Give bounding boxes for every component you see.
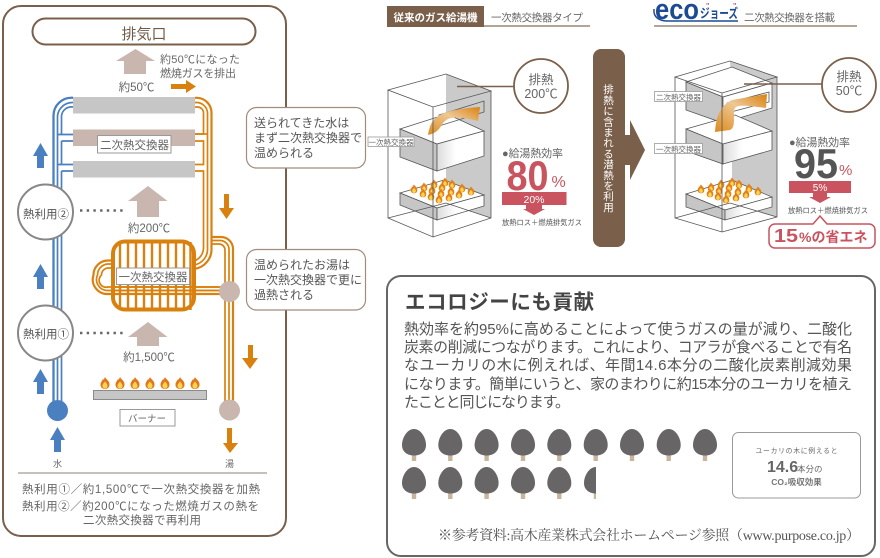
label: 50 degrees: 約50℃ bbox=[119, 80, 155, 94]
label: 200 degrees: 約200℃ bbox=[128, 221, 171, 235]
body text: たことと同じになります。 bbox=[404, 394, 570, 411]
notes: 熱利用②／約200℃になった燃焼ガスの熱を bbox=[22, 499, 259, 513]
notes: 熱利用①／約1,500℃で一次熱交換器を加熱 bbox=[22, 482, 260, 496]
label: hot water: 湯 bbox=[225, 459, 234, 469]
callout: 14.6 trees: ユーカリの木に例えると bbox=[756, 446, 838, 455]
primary block bbox=[686, 115, 772, 164]
panel: ecology contribution bbox=[387, 276, 875, 556]
central arrow: latent heat use: 排熱に含まれる潜熱を利用 bbox=[602, 83, 614, 213]
header: eco jozu: " bbox=[733, 3, 736, 10]
flames bbox=[100, 377, 200, 389]
label: secondary exchanger: 二次熱交換器 bbox=[100, 139, 169, 152]
callout: 15 percent saving: %の省エネ bbox=[799, 229, 867, 245]
efficiency 80: 放熱ロス＋燃焼排気ガス bbox=[502, 218, 582, 227]
header: conventional heater: 従来のガス給湯機 bbox=[394, 11, 478, 24]
use point 1 bbox=[18, 306, 125, 360]
arrow: 1500 degree gas bbox=[128, 322, 168, 346]
notes bbox=[22, 482, 260, 527]
header: eco jozu: ジョーズ bbox=[700, 6, 738, 21]
efficiency 95: 5% bbox=[813, 183, 827, 194]
burner block bbox=[400, 180, 484, 220]
efficiency 80: 80 bbox=[506, 152, 548, 199]
flames bbox=[698, 178, 761, 203]
use point 1: 熱利用① bbox=[23, 328, 69, 341]
central arrow: latent heat use bbox=[593, 49, 645, 247]
header: eco jozu: " bbox=[706, 3, 709, 10]
efficiency 95: ●給湯熱効率 bbox=[789, 136, 850, 149]
efficiency 80: 20% bbox=[523, 194, 545, 206]
header: conventional heater: 一次熱交換器タイプ bbox=[491, 11, 584, 24]
efficiency 95: 放熱ロス＋燃焼排気ガス bbox=[788, 206, 868, 215]
labels: 一次熱交換器 bbox=[656, 144, 701, 154]
body text: 炭素の削減につながります。これにより、コアラが食べることで有名 bbox=[404, 339, 852, 356]
header: eco jozu bbox=[654, 0, 857, 26]
callout: primary exchanger note: 温められたお湯は bbox=[254, 258, 350, 272]
callout: 14.6 trees: CO₂吸収効果 bbox=[771, 477, 822, 487]
label: 一次熱交換器 bbox=[368, 137, 414, 147]
label: primary exchanger: 一次熱交換器 bbox=[118, 271, 188, 284]
pipes: blue water line bbox=[53, 98, 73, 405]
callout: secondary exchanger note: 送られてきた水は bbox=[254, 115, 349, 130]
efficiency 95: 95 bbox=[794, 140, 838, 187]
trees pictogram bbox=[402, 429, 717, 499]
primary heat exchanger bbox=[113, 242, 219, 310]
efficiency 80: % bbox=[552, 174, 566, 191]
callout: 14.6 trees: 14.6 bbox=[767, 459, 798, 476]
body text: なユーカリの木に例えれば、年間14.6本分の二酸化炭素削減効果 bbox=[404, 357, 852, 374]
labels: 二次熱交換器 bbox=[656, 92, 701, 102]
label: burner bbox=[120, 410, 175, 426]
use point 2 bbox=[18, 184, 125, 240]
badge: exhaust heat 200: 排熱 bbox=[528, 73, 554, 87]
efficiency 95: % bbox=[839, 162, 852, 179]
callout: primary exchanger note: 一次熱交換器で更に bbox=[254, 273, 362, 287]
body text: 熱効率を約95%に高めることによって使うガスの量が減り、二酸化 bbox=[404, 321, 852, 338]
callout: 15 percent saving: 15 bbox=[774, 226, 798, 246]
arrow: exhaust gas up bbox=[116, 49, 155, 74]
diagram: conventional heater box bbox=[368, 74, 491, 237]
arrows: hot water down bbox=[219, 194, 258, 453]
callout: primary exchanger note bbox=[246, 250, 366, 310]
callout: secondary exchanger note: まず二次熱交換器で bbox=[254, 131, 362, 145]
badge: exhaust heat 200 bbox=[457, 59, 568, 113]
efficiency 95 bbox=[788, 136, 868, 215]
heading: exhaust port: 排気口 bbox=[121, 26, 167, 43]
burner bbox=[94, 390, 206, 400]
label: burner: バーナー bbox=[128, 414, 166, 425]
text: exhaust note bbox=[160, 52, 240, 80]
secondary block bbox=[686, 67, 772, 123]
callout: 15 percent saving bbox=[769, 216, 875, 248]
header: eco jozu: 二次熱交換器を搭載 bbox=[744, 11, 836, 24]
label: 1500 degrees: 約1,500℃ bbox=[123, 350, 175, 364]
arrow: gas flow bbox=[715, 94, 767, 132]
body text bbox=[404, 321, 852, 411]
header: conventional heater bbox=[387, 6, 590, 27]
primary exchanger block bbox=[400, 114, 484, 171]
diagram: eco heater box bbox=[654, 61, 777, 232]
badge: exhaust heat 50: 排熱 bbox=[836, 70, 862, 84]
badge: exhaust heat 50: 50℃ bbox=[836, 84, 862, 98]
junction nodes bbox=[47, 281, 240, 421]
arrow: 200 degree gas bbox=[128, 186, 168, 217]
burner block bbox=[686, 180, 772, 220]
badge: exhaust heat 200: 200℃ bbox=[524, 87, 558, 101]
use point 2: 熱利用② bbox=[23, 208, 69, 221]
heading: exhaust port bbox=[32, 18, 256, 44]
efficiency 80 bbox=[502, 147, 582, 227]
labels bbox=[654, 92, 702, 154]
pipes: orange hot water line bbox=[93, 98, 233, 410]
text: exhaust note: 約50℃になった bbox=[160, 52, 240, 66]
callout: secondary exchanger note: 温められる bbox=[254, 146, 314, 160]
callout: 14.6 trees bbox=[732, 432, 860, 498]
exchanger bands: secondary heat exchanger bbox=[73, 97, 195, 178]
badge: exhaust heat 50 bbox=[744, 58, 876, 112]
body text: になります。簡単にいうと、家のまわりに約15本分のユーカリを植え bbox=[404, 375, 852, 393]
source note: ※参考資料:高木産業株式会社ホームページ参照（www.purpose.co.jp） bbox=[438, 527, 860, 544]
label: water: 水 bbox=[53, 458, 62, 469]
callout: primary exchanger note: 過熱される bbox=[254, 288, 314, 302]
heading: エコロジーにも貢献 bbox=[405, 291, 594, 314]
arrows: water up bbox=[33, 143, 65, 452]
arrow: exhaust out bbox=[171, 80, 196, 93]
callout: secondary exchanger note bbox=[246, 108, 366, 168]
efficiency 80: ●給湯熱効率 bbox=[502, 147, 563, 160]
arrow: gas flow bbox=[428, 107, 480, 135]
notes: 二次熱交換器で再利用 bbox=[83, 514, 201, 527]
flames bbox=[411, 178, 474, 203]
callout: 14.6 trees: 本分の bbox=[797, 464, 823, 474]
text: exhaust note: 燃焼ガスを排出 bbox=[160, 66, 236, 80]
panel: heat flow diagram bbox=[3, 6, 286, 536]
